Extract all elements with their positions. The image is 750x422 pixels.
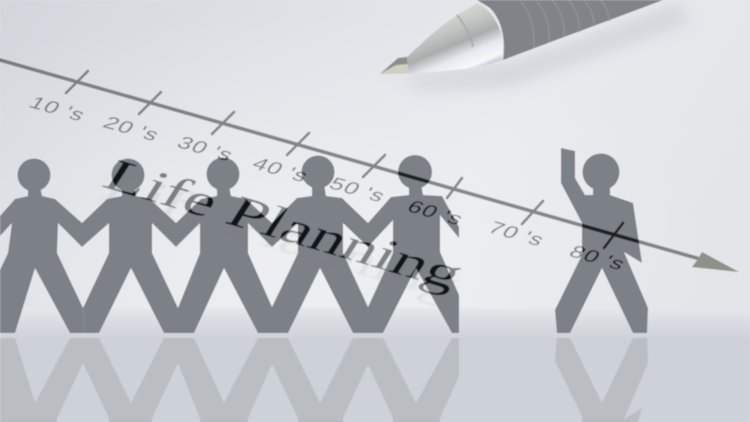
label 20's: 20's: [99, 112, 165, 145]
collar seam: [457, 15, 473, 47]
axis line: [0, 60, 700, 259]
floor: [0, 308, 750, 422]
figure 5: [368, 155, 459, 333]
pen shadow: [400, 5, 690, 88]
pen grip: [477, 0, 663, 60]
timeline axis: [0, 60, 700, 259]
figure 6: waving figure: [555, 148, 648, 333]
figure 2: [82, 158, 179, 333]
label 50's: 50's: [325, 173, 391, 206]
label 60's: 60's: [403, 196, 469, 229]
decade labels: [25, 92, 631, 274]
figure reflections on the floor: [0, 338, 648, 422]
figure 4: [272, 156, 369, 333]
label 70's: 70's: [484, 217, 550, 250]
paper-chain figures: [0, 148, 648, 333]
pen: [380, 0, 663, 74]
label 10's: 10's: [25, 92, 91, 125]
label 30's: 30's: [173, 132, 239, 165]
label 80's: 80's: [565, 241, 631, 274]
metal cone: [407, 3, 503, 74]
title: Life Planning: Life Planning: [94, 151, 473, 299]
nib: [380, 57, 408, 74]
grip ribs: [520, 0, 609, 48]
figure 1: [0, 158, 85, 333]
label 40's: 40's: [248, 153, 314, 186]
decade tick marks: [66, 71, 623, 248]
arrow head: [692, 252, 739, 272]
figure 3: [176, 158, 273, 333]
